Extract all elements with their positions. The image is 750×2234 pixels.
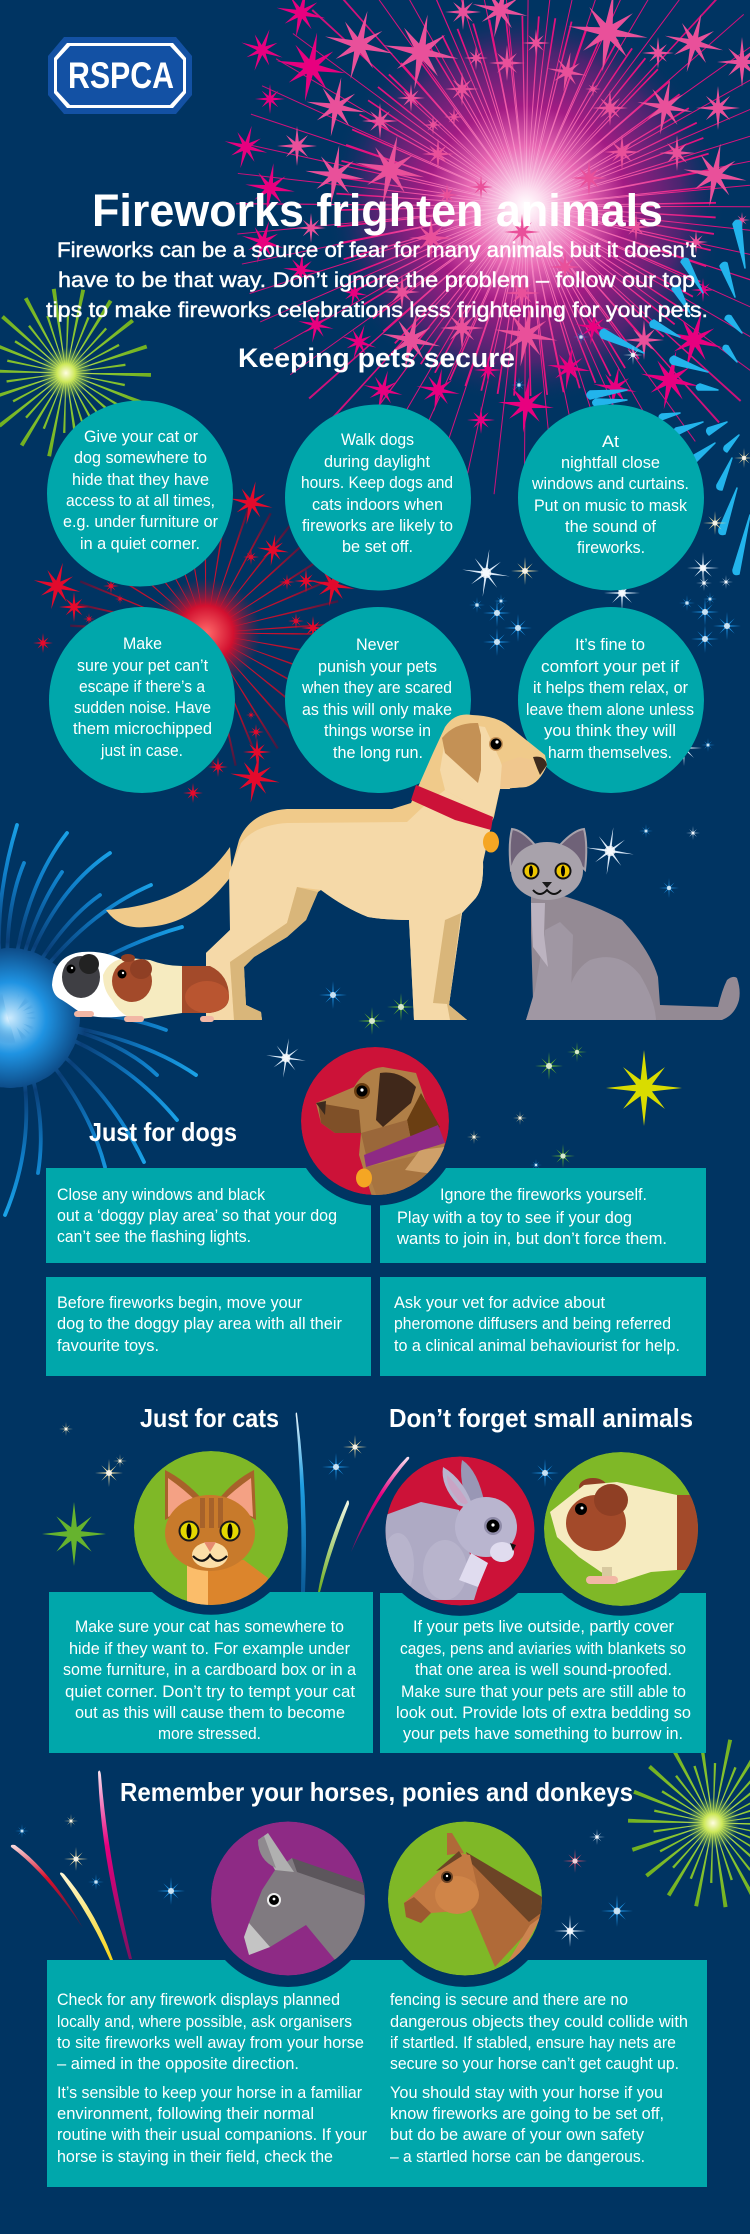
tip circle 3: the sound of — [565, 518, 656, 536]
tip circle 3: nightfall close — [561, 454, 660, 472]
text: horse advice right column: fencing is secure and there are no — [390, 1991, 628, 2009]
tip circle 1: e.g. under furniture or — [63, 513, 218, 531]
text: small animal tips: cages, pens and aviaries with blankets so — [400, 1640, 686, 1658]
heading: small animals: Don’t forget small animals — [389, 1403, 693, 1433]
tip circle 3: At — [602, 433, 619, 451]
logo: RSPCA: RSPCA — [68, 55, 174, 96]
text: horse advice right column: dangerous objects they could collide with — [390, 2013, 688, 2031]
portrait: dog — [301, 1047, 449, 1200]
text: horse advice right column: but do be aware of your own safety — [390, 2126, 645, 2144]
heading: horses: Remember your horses, ponies and donkeys — [120, 1777, 633, 1807]
tip circle 4: just in case. — [100, 742, 183, 760]
tip circle 1: in a quiet corner. — [80, 535, 200, 553]
tip circle 6: harm themselves. — [548, 744, 672, 762]
logo: RSPCA — [48, 37, 192, 114]
firework streaks: cats and small animals — [296, 1413, 409, 1592]
panel: dog tips — [46, 1168, 706, 1376]
tip circle 5: Never — [356, 636, 399, 654]
tip circle 4: them microchipped — [73, 720, 212, 738]
tip circle 2: fireworks are likely to — [302, 517, 453, 535]
panel: small animals — [380, 1593, 706, 1753]
heading: just for cats: Just for cats — [140, 1403, 279, 1433]
text: horse advice right column: – a startled horse can be dangerous. — [390, 2148, 645, 2166]
tip circle 2: during daylight — [324, 453, 430, 471]
tip circle 6 — [518, 607, 704, 793]
text: horse advice left column: horse is staying in their field, check the — [57, 2148, 333, 2166]
sparkle stars — [15, 329, 750, 1947]
text: dog tip 4: pheromone diffusers and being referred — [394, 1315, 671, 1333]
text: dog tip 3 — [57, 1294, 342, 1355]
text: small animal tips — [396, 1618, 691, 1743]
panel: horses — [47, 1960, 707, 2187]
tip circle 2: hours. Keep dogs and — [301, 474, 453, 492]
text: horse advice right column: You should stay with your horse if you — [390, 2084, 663, 2102]
text: dog tip 2 — [396, 1186, 667, 1248]
text: cat tips: more stressed. — [158, 1725, 261, 1743]
tip circle 4: escape if there’s a — [79, 678, 206, 696]
text: horse advice left column: routine with their usual companions. If your — [57, 2126, 367, 2144]
tip circle 1: hide that they have — [72, 471, 209, 489]
intro text: tips to make fireworks celebrations less frightening for your pets. — [46, 298, 708, 322]
text: horse advice right column: secure so your horse can’t get caught up. — [390, 2055, 679, 2073]
portrait: rabbit — [380, 1456, 534, 1606]
text: small animal tips: If your pets live outside, partly cover — [413, 1618, 675, 1636]
firework: red burst — [28, 477, 358, 807]
text: dog tip 1: out a ‘doggy play area’ so that your dog — [57, 1207, 337, 1225]
tip circle 3 — [518, 404, 704, 590]
tip circle 5 — [285, 607, 471, 793]
tip circle 3: Put on music to mask — [534, 497, 688, 515]
tip circle 2: Walk dogs — [341, 431, 414, 449]
text: dog tip 3: favourite toys. — [57, 1337, 159, 1355]
firework: green burst right — [670, 1780, 750, 1866]
text: small animal tips: that one area is well sound-proofed. — [415, 1661, 672, 1679]
text: horse advice right column: if startled. If stabled, ensure hay nets are — [390, 2034, 676, 2052]
title: Fireworks frighten animals — [92, 185, 663, 236]
tip circle 1: dog somewhere to — [74, 449, 207, 467]
tip circle 4: sure your pet can’t — [77, 657, 208, 675]
text: horse advice right column: know fireworks are going to be set off, — [390, 2105, 664, 2123]
text: dog tip 1 — [57, 1186, 337, 1246]
tip circle 6: leave them alone unless — [526, 701, 694, 719]
heading: keeping pets secure: Keeping pets secure — [238, 343, 515, 373]
text: horse advice left column: locally and, where possible, ask organisers — [57, 2013, 352, 2031]
text: horse advice left column: Check for any firework displays planned — [57, 1991, 340, 2009]
tip circle 4 — [49, 607, 235, 793]
tip circle 3: windows and curtains. — [531, 475, 689, 493]
firework: large pink burst — [219, 0, 750, 436]
tip circle 6: it helps them relax, or — [533, 679, 688, 697]
portrait: horse — [388, 1822, 542, 1976]
text: horse advice right column — [390, 1991, 688, 2166]
tip circle 2: cats indoors when — [312, 496, 443, 514]
text: cat tips: Make sure your cat has somewhere to — [75, 1618, 344, 1636]
firework: blue teardrops right — [587, 220, 750, 574]
tip circle 3: fireworks. — [577, 539, 645, 557]
panel: cats — [49, 1592, 373, 1753]
illustration: dog — [106, 714, 547, 1020]
tip circle 4: sudden noise. Have — [74, 699, 211, 717]
illustration: guinea pigs — [52, 952, 229, 1022]
text: cat tips: out as this will cause them to become — [75, 1704, 345, 1722]
tip circle 5: things worse in — [324, 722, 431, 740]
text: cat tips: quiet corner. Don’t try to tempt your cat — [65, 1683, 355, 1701]
text: horse advice left column: to site fireworks well away from your horse — [57, 2034, 364, 2052]
firework streaks: horses — [11, 1771, 132, 1960]
portrait: guinea pig — [544, 1452, 702, 1606]
text: dog tip 1: Close any windows and black — [57, 1186, 266, 1204]
tip circle 5: when they are scared — [301, 679, 452, 697]
text: horse advice left column: – aimed in the opposite direction. — [57, 2055, 299, 2073]
text: cat tips: some furniture, in a cardboard box or in a — [63, 1661, 357, 1679]
text: dog tip 2: wants to join in, but don’t force them. — [396, 1230, 667, 1248]
intro text: have to be that way. Don’t ignore the problem – follow our top — [58, 268, 695, 292]
intro text: Fireworks can be a source of fear for many animals but it doesn’t — [57, 238, 696, 262]
text: dog tip 3: Before fireworks begin, move your — [57, 1294, 302, 1312]
text: horse advice left column: It’s sensible to keep your horse in a familiar — [57, 2084, 362, 2102]
illustration: cat — [510, 829, 740, 1020]
text: dog tip 1: can’t see the flashing lights. — [57, 1228, 251, 1246]
tip circle 5: punish your pets — [318, 658, 437, 676]
heading: just for dogs: Just for dogs — [89, 1117, 237, 1147]
portrait: donkey — [211, 1822, 370, 1980]
text: cat tips — [63, 1618, 357, 1743]
firework: blue burst lower left — [0, 825, 196, 1215]
text: horse advice left column — [57, 1991, 367, 2166]
text: dog tip 2: Play with a toy to see if your dog — [397, 1209, 632, 1227]
tip circle 1 — [47, 400, 233, 586]
tip circle 6: comfort your pet if — [541, 658, 679, 676]
text: cat tips: hide if they want to. For example under — [69, 1640, 350, 1658]
text: horse advice left column: environment, following their normal — [57, 2105, 314, 2123]
firework: green burst top left — [24, 330, 108, 416]
portrait: cat — [134, 1451, 288, 1610]
text: small animal tips: your pets have something to burrow in. — [403, 1725, 683, 1743]
text: dog tip 4 — [394, 1294, 680, 1355]
tip circle 2: be set off. — [342, 538, 413, 556]
tip circle 5: the long run. — [333, 744, 423, 762]
tip circle 6: you think they will — [544, 722, 676, 740]
tip circle 1: Give your cat or — [84, 428, 198, 446]
text: small animal tips: look out. Provide lots of extra bedding so — [396, 1704, 691, 1722]
tip circle 6: It’s fine to — [575, 636, 645, 654]
text: dog tip 4: Ask your vet for advice about — [394, 1294, 605, 1312]
text: dog tip 4: to a clinical animal behaviourist for help. — [394, 1337, 680, 1355]
text: dog tip 3: dog to the doggy play area with all their — [57, 1315, 342, 1333]
intro text — [46, 238, 708, 322]
text: small animal tips: Make sure that your pets are still able to — [401, 1683, 686, 1701]
tip circle 2 — [285, 404, 471, 590]
tip circle 4: Make — [123, 635, 162, 653]
text: dog tip 2: Ignore the fireworks yourself. — [440, 1186, 647, 1204]
tip circle 1: access to at all times, — [66, 492, 215, 510]
tip circle 5: as this will only make — [302, 701, 452, 719]
